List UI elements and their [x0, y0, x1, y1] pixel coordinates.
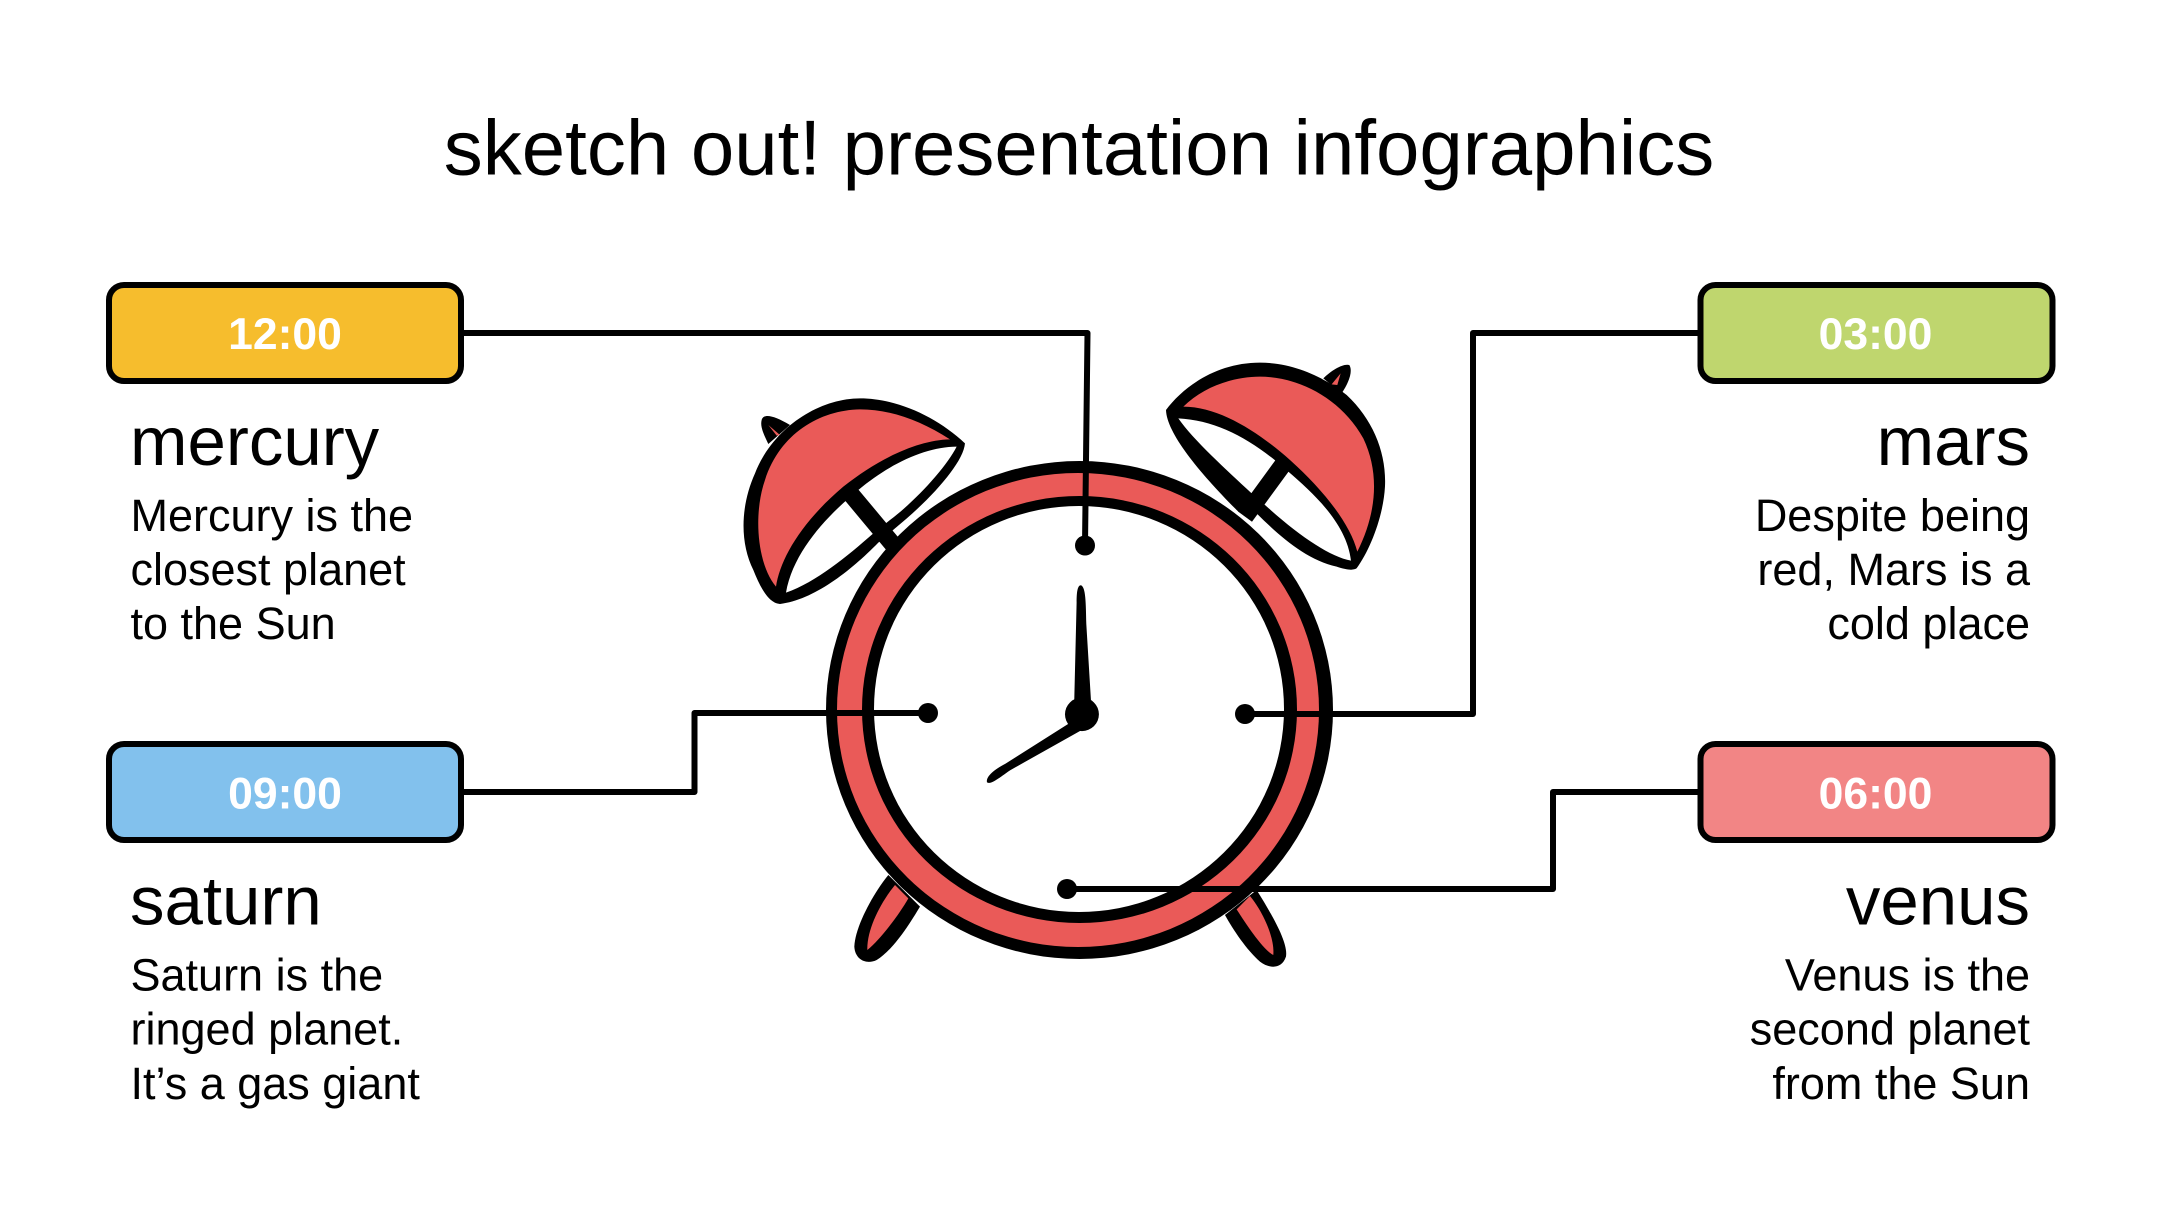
- time badge 03:00: 03:00: [1819, 310, 1932, 359]
- panel: mercury: [109, 285, 461, 649]
- connector: 03:00 to right marker: [1235, 333, 1699, 724]
- time badge 09:00: [109, 744, 461, 840]
- text block: closest planet: [130, 544, 406, 595]
- panel: venus: [1700, 744, 2052, 1109]
- text block: Saturn is the: [130, 950, 383, 1000]
- text block: second planet: [1750, 1004, 2030, 1054]
- text block: to the Sun: [130, 598, 336, 649]
- text block: Mercury is the: [130, 490, 413, 541]
- text block: red, Mars is a: [1757, 544, 2031, 595]
- panel: mars: [1700, 285, 2052, 649]
- icon: left bell: [744, 398, 965, 604]
- connector: 06:00 to bottom marker: [1057, 792, 1699, 899]
- heading: mars: [1877, 403, 2030, 480]
- time badge 12:00: 12:00: [228, 310, 342, 359]
- text block: cold place: [1827, 598, 2030, 649]
- connector: 12:00 to top marker: [464, 333, 1095, 556]
- icon: clock ring: [826, 461, 1333, 959]
- icon: right bell: [1166, 363, 1385, 570]
- time badge 12:00: [109, 285, 461, 381]
- time badge 03:00: [1700, 285, 2052, 381]
- icon: left foot: [854, 875, 920, 962]
- text block: Despite being: [1755, 490, 2030, 541]
- heading: mercury: [130, 403, 380, 480]
- icon: right foot: [1225, 890, 1286, 967]
- time badge 09:00: 09:00: [228, 770, 342, 818]
- time badge 06:00: 06:00: [1819, 770, 1932, 818]
- text block: from the Sun: [1772, 1058, 2030, 1109]
- title: sketch out! presentation infographics: [444, 104, 1714, 192]
- panel: saturn: [109, 744, 461, 1109]
- heading: saturn: [130, 862, 322, 940]
- text block: ringed planet.: [130, 1004, 403, 1054]
- icon: clock hands: [987, 585, 1099, 783]
- heading: venus: [1846, 862, 2030, 940]
- text block: Venus is the: [1785, 950, 2030, 1000]
- connector: 09:00 to left marker: [464, 703, 938, 792]
- illustration: red alarm clock: [744, 363, 1385, 967]
- time badge 06:00: [1700, 744, 2052, 840]
- text block: It’s a gas giant: [130, 1058, 420, 1109]
